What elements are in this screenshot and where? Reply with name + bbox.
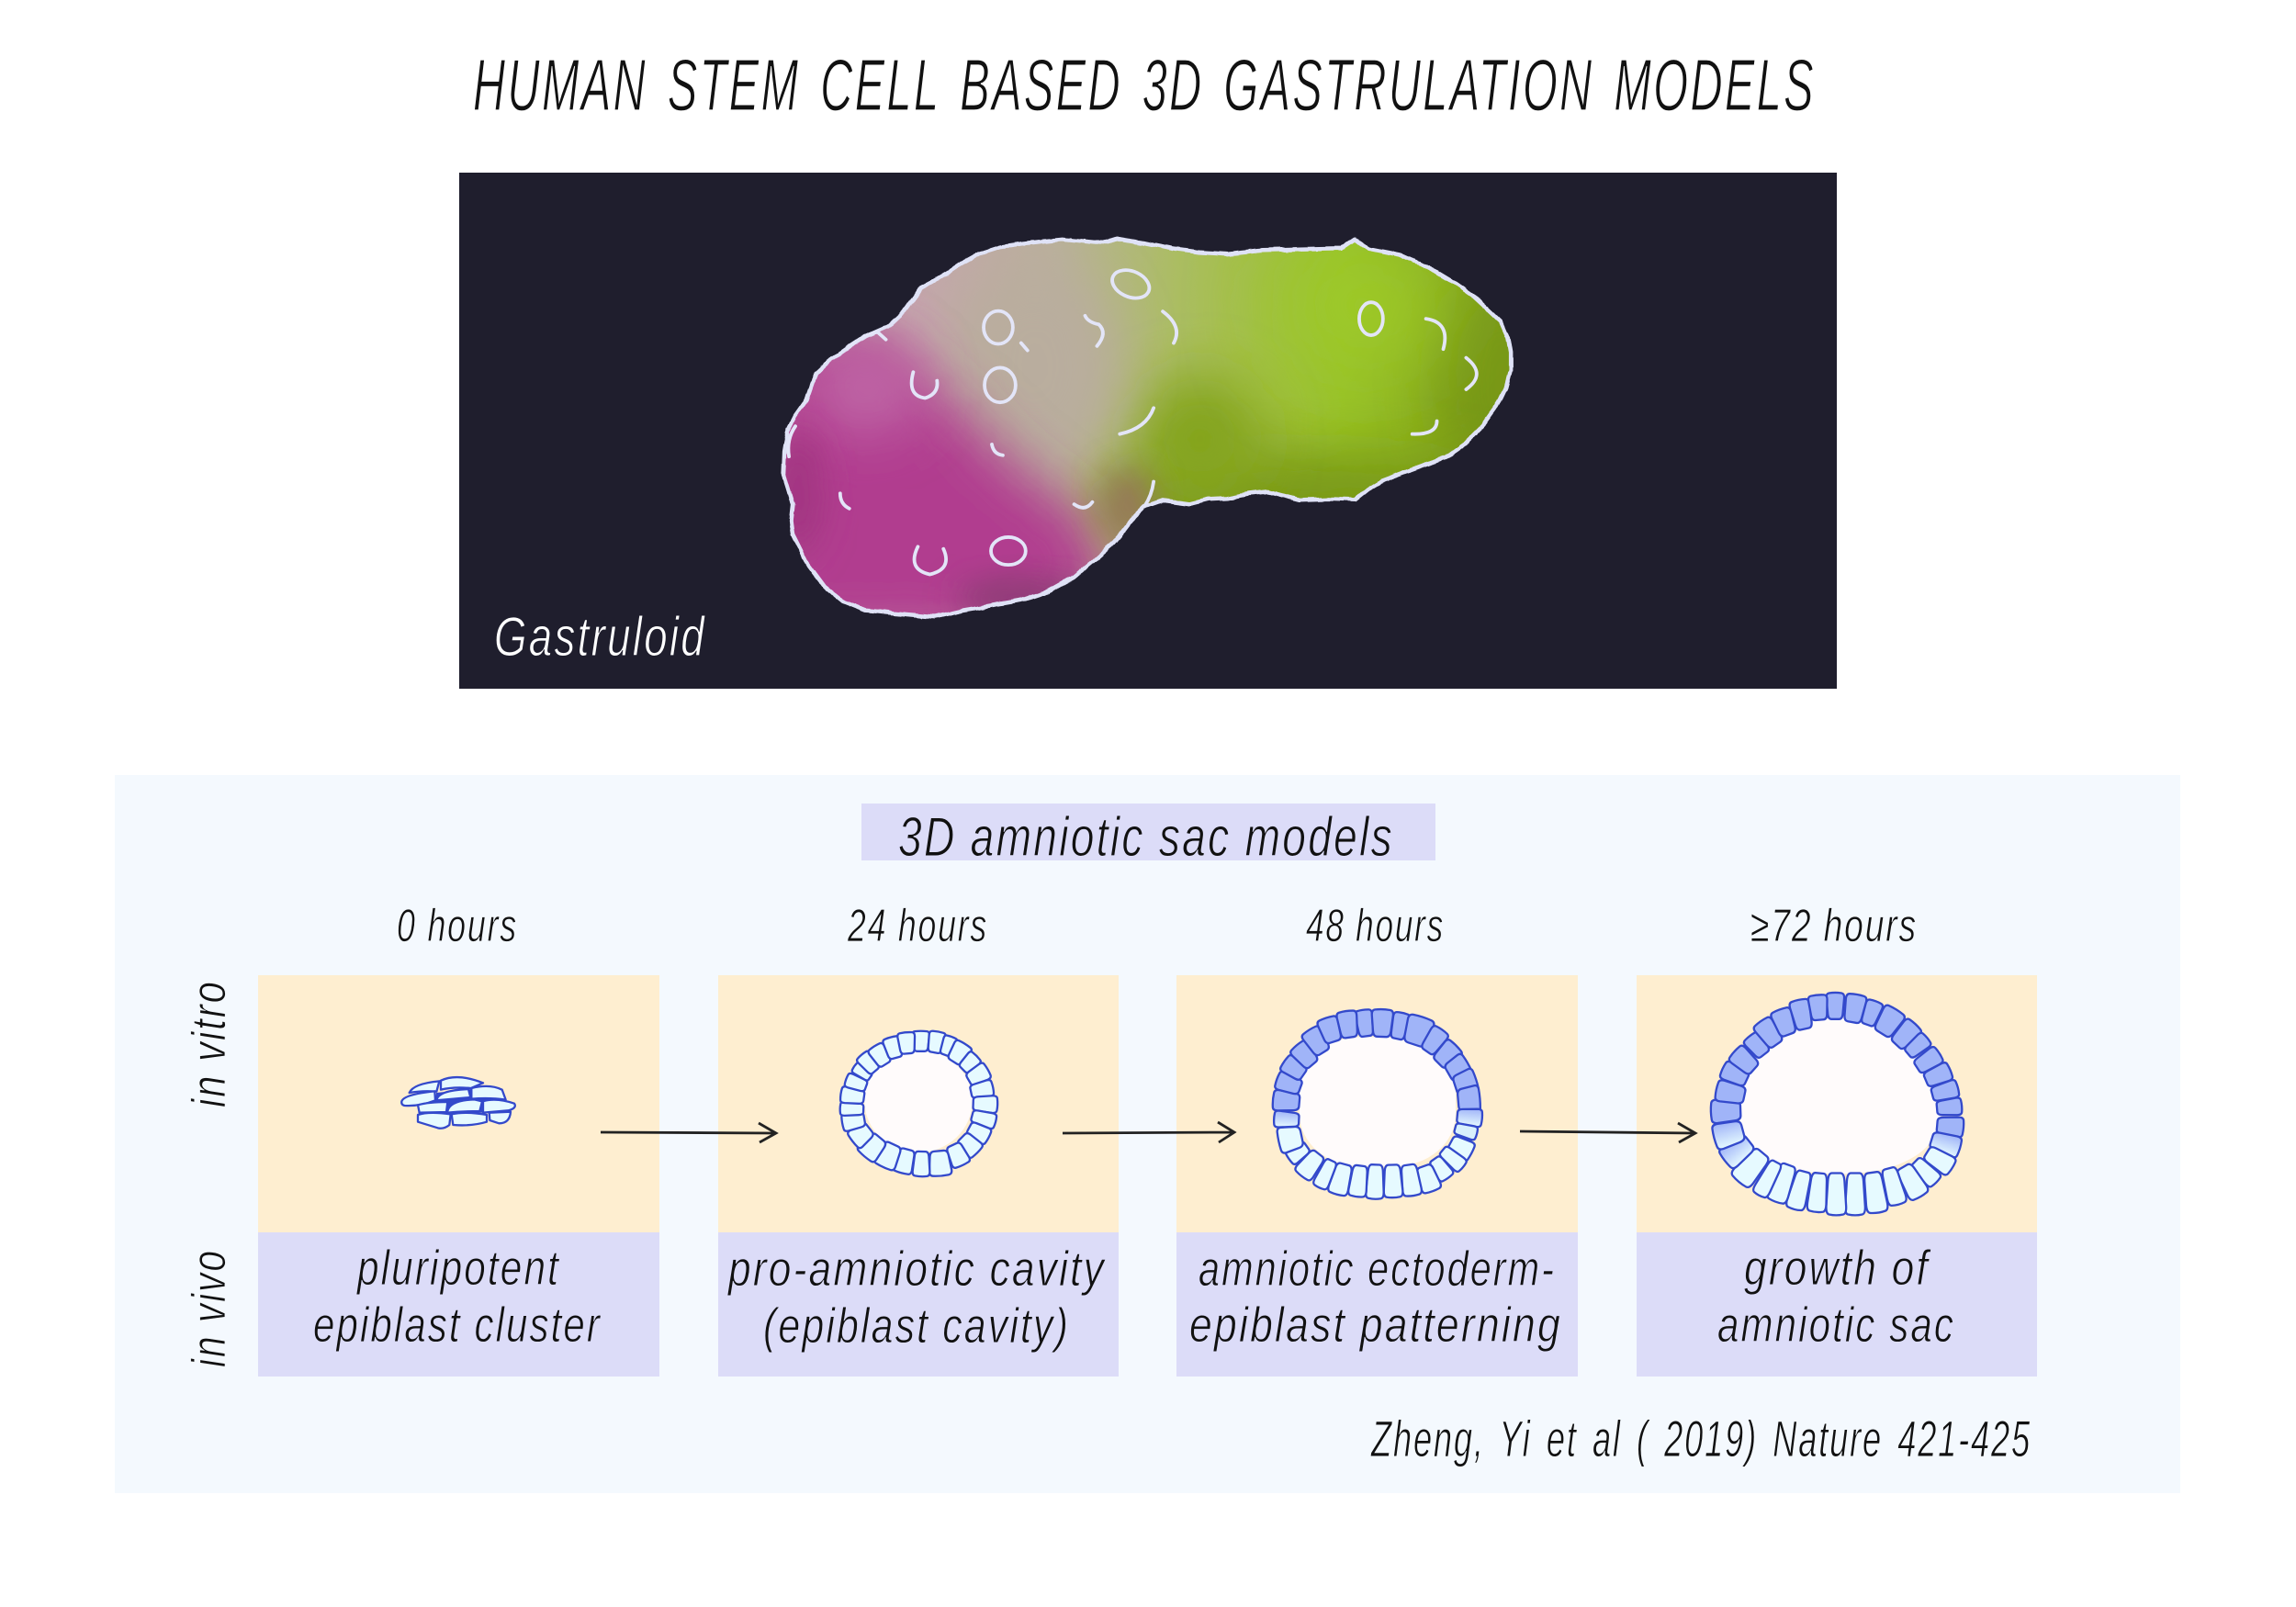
caption box: amniotic ectoderm-epiblast patterning <box>1176 1232 1578 1377</box>
stage card: 0 hours <box>258 975 659 1377</box>
time label: 48 hours: 48 hours <box>1306 900 1445 951</box>
time label: 0 hours: 0 hours <box>397 900 518 951</box>
time label: 72 hours or more: ≥72 hours <box>1750 900 1918 951</box>
caption box: pluripotent epiblast cluster: epiblast cluster <box>313 1298 602 1353</box>
caption box: pro-amniotic cavity (epiblast cavity): (epiblast cavity) <box>763 1298 1070 1354</box>
blob outline <box>783 239 1510 617</box>
panel: 3D amniotic sac models <box>115 775 2180 1493</box>
label: Gastruloid: Gastruloid <box>494 606 706 668</box>
caption box: amniotic ectoderm-epiblast patterning: amniotic ectoderm- <box>1199 1242 1556 1297</box>
caption box: pro-amniotic cavity (epiblast cavity): pro-amniotic cavity <box>726 1242 1106 1297</box>
heading: 3D amniotic sac models: 3D amniotic sac models <box>898 806 1394 868</box>
illustration: gastruloid blob <box>781 236 1514 619</box>
caption box: growth of amniotic sac: growth of <box>1744 1241 1931 1296</box>
caption box: pro-amniotic cavity (epiblast cavity) <box>718 1232 1119 1377</box>
time label: 24 hours: 24 hours <box>847 900 988 951</box>
caption box: growth of amniotic sac <box>1637 1232 2037 1377</box>
caption box: amniotic ectoderm-epiblast patterning: epiblast patterning <box>1189 1298 1562 1353</box>
row label: in vitro: in vitro <box>183 980 236 1107</box>
caption box: growth of amniotic sac: amniotic sac <box>1717 1298 1955 1353</box>
icon: pro-amniotic ring of light cells <box>839 1030 998 1177</box>
icon: patterned ring with blue upper cells <box>1272 1008 1483 1199</box>
caption box: pluripotent epiblast cluster: pluripotent <box>355 1241 560 1296</box>
caption box: pluripotent epiblast cluster <box>258 1232 659 1377</box>
icon: pluripotent cell cluster <box>401 1077 515 1129</box>
stage card: 48 hours <box>1176 975 1578 1377</box>
stage card: 72 hours or more <box>1637 975 2037 1377</box>
icon: grown amniotic sac ring <box>1710 993 1964 1215</box>
row label: in vivo: in vivo <box>183 1249 236 1367</box>
small cell outlines inside blob <box>788 268 1477 575</box>
panel: gastruloid <box>459 173 1837 689</box>
arrow: 48 to 72 hours <box>1520 1123 1695 1142</box>
stage card: 24 hours <box>718 975 1119 1377</box>
arrow: 24 to 48 hours <box>1063 1122 1234 1142</box>
arrow: 0 to 24 hours <box>601 1123 776 1142</box>
